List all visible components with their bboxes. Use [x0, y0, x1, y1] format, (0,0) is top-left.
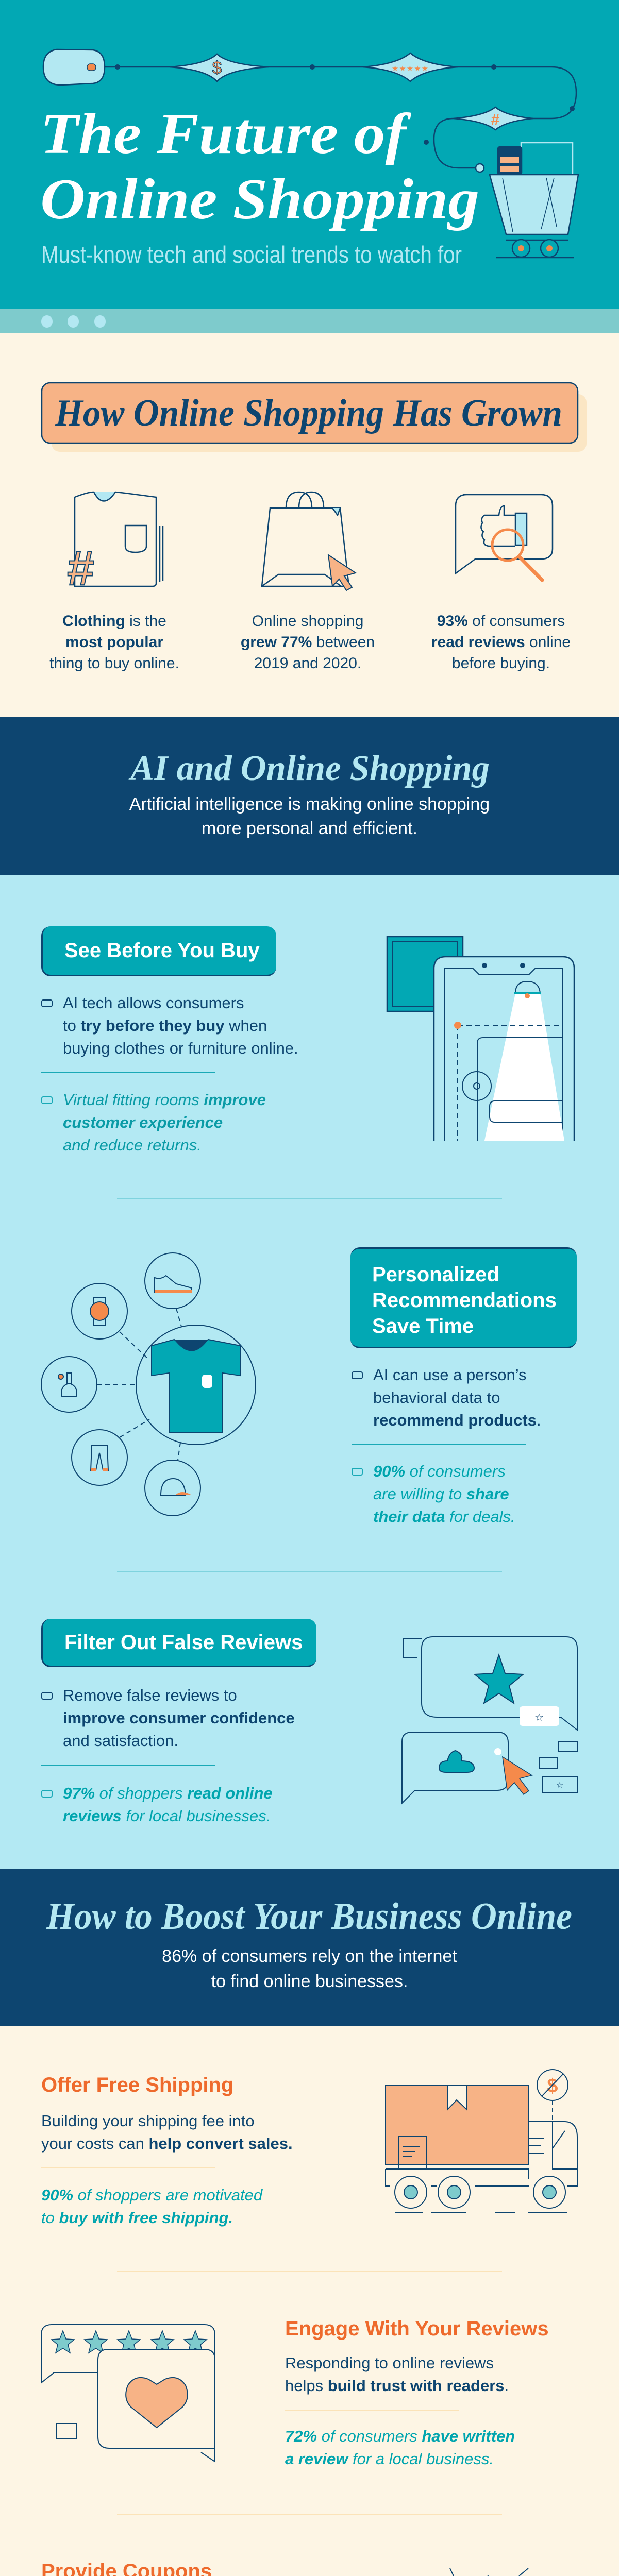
- box: Personalized Recommendations Save Time: Personalized: [372, 1263, 499, 1286]
- stat: 72% have written a review: [285, 2427, 515, 2468]
- subtitle: Must-know tech and social trends to watch for: [41, 241, 462, 268]
- title: Online Shopping: [40, 167, 479, 231]
- icon: pants: [91, 1446, 108, 1471]
- bullet text: recommend products: recommend products.: [373, 1411, 541, 1429]
- illustration: chat bubbles with star and cursor: ☆: [534, 1711, 544, 1723]
- bullet text: try before they buy: AI tech allows consumers: [63, 994, 244, 1012]
- title: The Future of: [40, 102, 412, 166]
- heading banner: How Online Shopping Has Grown: How Online Shopping Has Grown: [55, 392, 562, 434]
- stat: 90% share data: 90% of consumers: [373, 1462, 506, 1480]
- stat: 90% free shipping: to buy with free shipping.: [41, 2209, 233, 2227]
- section: How to Boost Your Business Online (navy band): [0, 1869, 619, 2026]
- illustration: delivery truck: [385, 2069, 578, 2213]
- stat: 90% free shipping: 90% of shoppers are motivated: [41, 2186, 262, 2204]
- boost subtitle: to find online businesses.: [211, 1972, 408, 1991]
- illustration: delivery truck: $: [547, 2075, 558, 2097]
- box: Filter Out False Reviews: Filter Out False Reviews: [64, 1631, 303, 1654]
- AI subtitle: more personal and efficient.: [202, 819, 417, 838]
- bullet text: remove false reviews: Remove false reviews to: [63, 1686, 237, 1704]
- boost heading: How to Boost Your Business Online: [46, 1895, 572, 1938]
- box: See Before You Buy: [41, 926, 276, 976]
- bullet text: try before they buy: to try before they buy when: [63, 1016, 267, 1035]
- icon: t-shirt teal: [152, 1340, 240, 1432]
- icon: mouse: [43, 49, 105, 85]
- bullet text: try before they buy: buying clothes or furniture online.: [63, 1039, 298, 1057]
- illustration: chat bubbles with star and cursor: ☆: [556, 1780, 563, 1790]
- text: shipping fee: your costs can help convert sales.: [41, 2134, 293, 2153]
- browser strip with dots: [0, 309, 619, 333]
- bullet text: remove false reviews: improve consumer confidence: [63, 1709, 295, 1727]
- icon: t-shirt with hashtag: [67, 492, 164, 590]
- text: respond to reviews: Responding to online reviews: [285, 2354, 494, 2372]
- stat: 90% free shipping: [41, 2186, 263, 2227]
- icon: hashtag diamond: [454, 107, 533, 130]
- icon: perfume: [58, 1373, 77, 1396]
- stat: 90% share data: their data for deals.: [373, 1507, 515, 1526]
- illustration: product recommendation cluster: [41, 1252, 256, 1516]
- text: respond to reviews: [285, 2354, 509, 2395]
- bullet text: recommend products: [352, 1366, 541, 1429]
- illustration: envelope with coupon tag: [449, 2568, 529, 2576]
- box: Personalized Recommendations Save Time: Save Time: [372, 1315, 474, 1337]
- stat: 97% read reviews: [41, 1784, 273, 1825]
- icon: stars diamond: [363, 53, 458, 81]
- AI heading: AI and Online Shopping: [128, 749, 490, 788]
- illustration: star reviews with heart: [41, 2324, 215, 2463]
- stat: 72% have written a review: 72% of consumers have written: [285, 2427, 515, 2445]
- title: [40, 102, 479, 231]
- text: respond to reviews: helps build trust with readers.: [285, 2377, 509, 2395]
- stat: growth 77%: 2019 and 2020.: [254, 655, 361, 672]
- icon: shopping cart: [476, 143, 578, 258]
- illustration: phone fitting room: [387, 936, 575, 1141]
- stat: growth 77%: Online shopping: [252, 613, 363, 630]
- icon: dollar diamond: $: [212, 58, 222, 78]
- icon: hashtag diamond: #: [491, 111, 500, 128]
- icon: dollar diamond: [170, 54, 269, 81]
- stat: clothing: thing to buy online.: [49, 655, 179, 672]
- stat: 90% share data: are willing to share: [373, 1485, 509, 1503]
- heading banner: How Online Shopping Has Grown: [41, 382, 587, 452]
- icon: stars diamond: ★★★★★: [392, 64, 429, 73]
- stat: virtual fitting rooms: [41, 1091, 266, 1154]
- stat: 93% reviews: read reviews online: [431, 634, 571, 651]
- bullet text: recommend products: AI can use a person’s: [373, 1366, 527, 1384]
- stat: 93% reviews: 93% of consumers: [437, 613, 565, 630]
- icon: shoe: [155, 1276, 192, 1292]
- stat: virtual fitting rooms: and reduce returns.: [63, 1136, 202, 1154]
- AI subtitle: [129, 794, 490, 838]
- icon: watch: [90, 1297, 109, 1325]
- header background: [0, 0, 619, 309]
- icon: review bubble with thumbs up and magnifier: [455, 494, 554, 582]
- heading: Engage With Your Reviews: Engage With Your Reviews: [285, 2317, 549, 2340]
- heading: Offer Free Shipping: Offer Free Shipping: [41, 2074, 233, 2096]
- header illustration: mouse to cart path: [42, 48, 579, 259]
- box: Personalized Recommendations Save Time: Recommendations: [372, 1289, 557, 1312]
- bullet text: try before they buy: [41, 994, 298, 1057]
- box: Filter Out False Reviews: [41, 1619, 316, 1667]
- stat: virtual fitting rooms: customer experience: [63, 1113, 223, 1131]
- stat: virtual fitting rooms: Virtual fitting rooms improve: [63, 1091, 266, 1109]
- bullet text: recommend products: behavioral data to: [373, 1388, 500, 1406]
- section background: light blue AI features: [0, 875, 619, 1869]
- boost subtitle: [162, 1946, 457, 1991]
- stat: 93% reviews: before buying.: [452, 655, 550, 672]
- stat: 97% read reviews: reviews for local businesses.: [63, 1807, 271, 1825]
- stat: growth 77%: [241, 613, 375, 672]
- stat: 90% share data: [352, 1462, 515, 1526]
- text: shipping fee: [41, 2112, 293, 2153]
- stat: 72% have written a review: a review for a local business.: [285, 2450, 494, 2468]
- stat: growth 77%: grew 77% between: [241, 634, 375, 651]
- text: shipping fee: Building your shipping fee into: [41, 2112, 255, 2130]
- stat: clothing: [49, 613, 179, 672]
- AI subtitle: Artificial intelligence is making online shopping: [129, 794, 490, 814]
- icon: cap: [161, 1479, 192, 1495]
- boost subtitle: 86% of consumers rely on the internet: [162, 1946, 457, 1966]
- icon: shopping bag with cursor: [261, 492, 357, 591]
- stat: 93% reviews: [431, 613, 571, 672]
- stat: clothing: Clothing is the: [62, 613, 166, 630]
- stat: clothing: most popular: [65, 634, 163, 651]
- stat: 97% read reviews: 97% of shoppers read online: [63, 1784, 273, 1802]
- bullet text: remove false reviews: and satisfaction.: [63, 1732, 178, 1750]
- box: Personalized Recommendations Save Time: [350, 1247, 577, 1348]
- bullet text: remove false reviews: [41, 1686, 295, 1750]
- illustration: chat bubbles with star and cursor: [401, 1636, 578, 1804]
- box: See Before You Buy: See Before You Buy: [64, 939, 260, 962]
- section: AI and Online Shopping (navy band): [0, 717, 619, 875]
